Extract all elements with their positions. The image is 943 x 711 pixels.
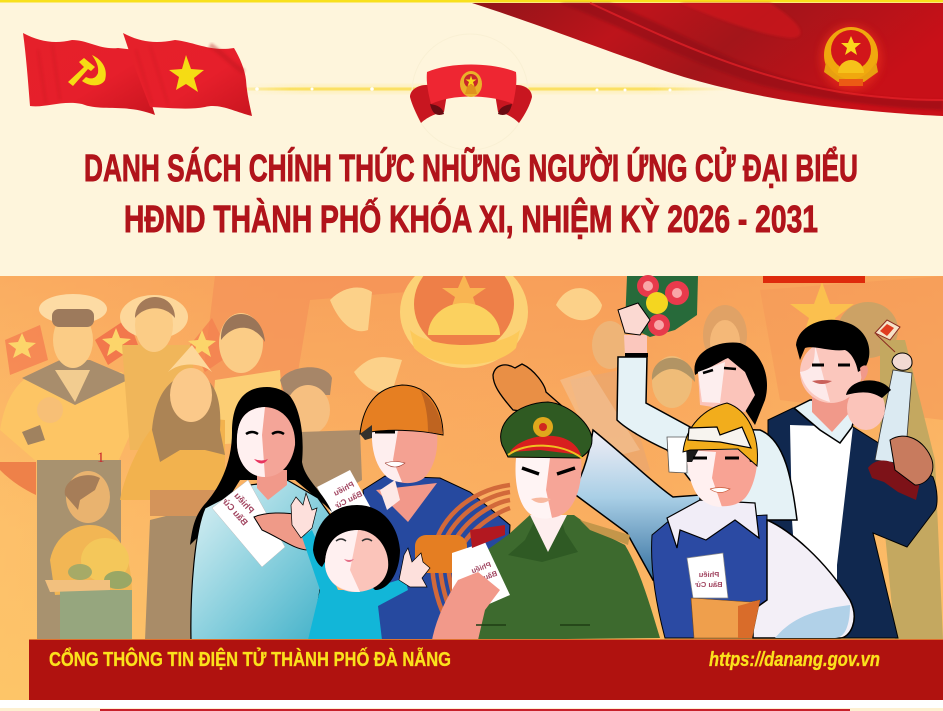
- rope coil: [432, 485, 510, 622]
- background poster figures: [0, 256, 943, 640]
- raised fist: [493, 364, 562, 412]
- figure: police officer: [432, 364, 660, 640]
- ballot: Phiếu: [698, 570, 719, 579]
- figure: worker in yellow helmet: [573, 403, 854, 638]
- figure: worker in orange helmet with rope: Bầu Cử: [334, 489, 364, 510]
- ballot: [212, 480, 285, 567]
- header panel: [0, 0, 943, 276]
- ballot: [687, 553, 728, 598]
- footer: website: https://danang.gov.vn: [709, 649, 880, 671]
- faded flags and stars: [5, 325, 48, 375]
- footer: portal name: CỔNG THÔNG TIN ĐIỆN TỬ THÀNH PHỐ ĐÀ NẴNG: [49, 647, 451, 671]
- faded sailor: [0, 294, 134, 640]
- uniform pockets: [476, 624, 590, 626]
- red silk drape: [472, 3, 943, 116]
- ballot: Bầu Cử: [220, 496, 250, 527]
- icon: yellow star: [169, 55, 204, 92]
- baby: [846, 320, 933, 500]
- faded national emblem: [400, 276, 528, 368]
- figure: worker in orange helmet with rope: Phiếu: [332, 480, 356, 498]
- ballot behind child: [317, 470, 372, 530]
- figure: police officer: Phiếu: [470, 560, 492, 576]
- faded women and men: [120, 295, 362, 640]
- figure: worker in orange helmet with rope: [317, 385, 510, 640]
- ballot: Phiếu: [232, 491, 256, 515]
- illustration panel: voters: [0, 256, 943, 700]
- glowing ribbon line: [212, 84, 732, 94]
- figure: man in navy suit with baby: [768, 320, 937, 638]
- icon: Vietnam flag: [123, 33, 252, 116]
- bottom edge strip: [0, 708, 943, 711]
- faded right group: [560, 302, 943, 640]
- icon: national emblem on drape: [820, 25, 882, 91]
- icon: party flag: [23, 33, 155, 115]
- stray numeral: 1: [97, 450, 104, 466]
- icon: central ribbon with emblem: [410, 64, 532, 123]
- red tab top: [763, 276, 865, 283]
- icon: hammer and sickle: [68, 55, 106, 86]
- faded child with flowers: [45, 471, 132, 640]
- figure: woman holding bouquet: [617, 275, 797, 520]
- bouquet: [618, 275, 698, 337]
- faded doves: [330, 287, 372, 331]
- ballot: Bầu Cử: [695, 580, 723, 589]
- figure: police officer: Bầu Cử: [469, 569, 498, 587]
- figure: child in teal: [291, 493, 430, 640]
- figure: woman in ao dai: [190, 387, 332, 640]
- footer bar: [29, 639, 943, 700]
- title: [84, 145, 858, 241]
